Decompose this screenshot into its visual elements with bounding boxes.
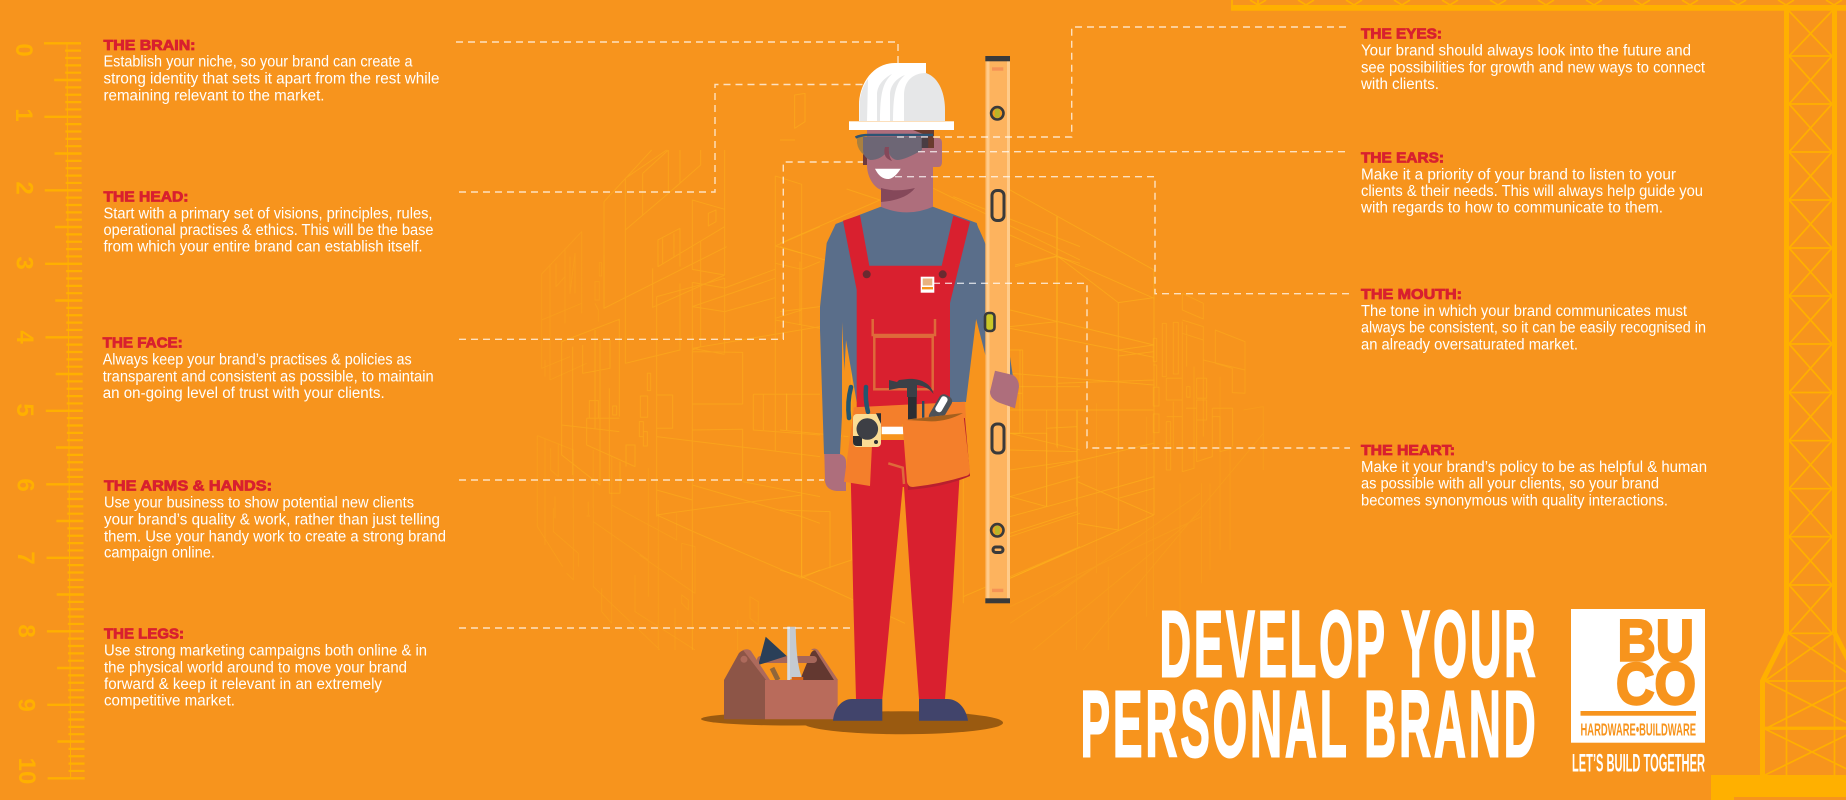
ruler numbers: 2 bbox=[10, 181, 37, 195]
title bbox=[1080, 592, 1538, 778]
text: the legs: Use strong marketing campaigns both online & in bbox=[104, 643, 427, 660]
level vial centres bbox=[995, 109, 1000, 535]
text: the ears: THE EARS: bbox=[1361, 150, 1444, 166]
text: the eyes: THE EYES: bbox=[1361, 27, 1442, 43]
straps buttons bbox=[863, 270, 947, 278]
text: the arms and hands: Use your business to show potential new clients bbox=[104, 495, 414, 512]
logo: BUCO: BU bbox=[1618, 609, 1694, 674]
icon: hammer bbox=[889, 379, 934, 421]
text: the legs: forward & keep it relevant in an extremely bbox=[104, 676, 382, 693]
icon: toolbox bbox=[724, 627, 838, 719]
text: the eyes: Your brand should always look into the future and bbox=[1361, 43, 1691, 60]
text: the ears: Make it a priority of your brand to listen to your bbox=[1361, 166, 1676, 183]
callout: head bbox=[459, 84, 867, 192]
callout: ears bbox=[918, 151, 1350, 153]
callout: face bbox=[459, 162, 863, 339]
text: the ears: clients & their needs. This will always help guide you bbox=[1361, 183, 1703, 200]
ruler numbers bbox=[10, 43, 40, 784]
logo: BUCO bbox=[1571, 609, 1705, 743]
icon: tape measure bbox=[853, 413, 881, 447]
text: the brain: THE BRAIN: bbox=[104, 38, 196, 54]
text: the ears bbox=[1360, 150, 1703, 217]
text: the heart: Make it your brand’s policy to be as helpful & human bbox=[1361, 459, 1707, 476]
ruler numbers: 7 bbox=[12, 551, 39, 565]
ruler bbox=[44, 42, 85, 780]
left hand bbox=[824, 454, 846, 491]
text: the legs: the physical world around to move your brand bbox=[104, 659, 407, 676]
gap between arm and torso bbox=[842, 322, 846, 452]
crane mast bbox=[1762, 5, 1846, 775]
text: the mouth: The tone in which your brand communicates must bbox=[1361, 303, 1688, 320]
neck and head bbox=[863, 130, 942, 214]
ruler numbers: 6 bbox=[12, 478, 39, 492]
level slots bbox=[992, 190, 1004, 552]
callout: brain bbox=[456, 42, 898, 64]
icon: screwdriver bbox=[922, 401, 924, 422]
bib pocket bbox=[873, 319, 935, 389]
text: the head: from which your entire brand can establish itself. bbox=[104, 239, 422, 256]
icon: cutter bbox=[927, 392, 954, 425]
logo: BUCO: HARDWARE•BUILDWARE bbox=[1580, 719, 1696, 739]
spirit level bbox=[985, 56, 1010, 603]
text: the face: Always keep your brand’s practises & policies as bbox=[103, 351, 412, 368]
text: the brain: Establish your niche, so your brand can create a bbox=[104, 54, 413, 71]
text: the face: an on-going level of trust with your clients. bbox=[103, 385, 385, 402]
crane bbox=[1231, 0, 1846, 800]
callout: eyes bbox=[897, 27, 1350, 137]
boots bbox=[833, 699, 968, 721]
text: the legs bbox=[104, 626, 427, 710]
text: the legs: THE LEGS: bbox=[104, 626, 184, 642]
logo: BUCO: CO bbox=[1616, 652, 1696, 717]
ruler numbers: 1 bbox=[10, 108, 37, 122]
ruler numbers: 4 bbox=[11, 330, 38, 344]
ruler numbers: 10 bbox=[13, 758, 40, 784]
badge bbox=[921, 277, 934, 293]
text: the brain: remaining relevant to the market. bbox=[104, 87, 324, 104]
text: the mouth bbox=[1361, 287, 1706, 354]
text: the eyes: with clients. bbox=[1360, 76, 1439, 93]
ruler numbers: 8 bbox=[12, 624, 39, 638]
callout: legs bbox=[459, 627, 854, 629]
text: the eyes bbox=[1360, 27, 1706, 93]
right column text bbox=[1360, 27, 1707, 509]
text: the brain: strong identity that sets it apart from the rest while bbox=[104, 71, 440, 88]
far arm bbox=[973, 223, 1013, 377]
text: the heart: THE HEART: bbox=[1361, 443, 1455, 459]
text: the arms and hands: THE ARMS & HANDS: bbox=[104, 478, 272, 494]
wireframe building background bbox=[537, 93, 1263, 650]
icon: saw bbox=[787, 627, 803, 681]
left column text bbox=[103, 38, 446, 710]
text: the arms and hands: campaign online. bbox=[104, 545, 215, 562]
text: the heart: as possible with all your clients, so your brand bbox=[1361, 476, 1659, 493]
text: the ears: with regards to how to communicate to them. bbox=[1360, 200, 1663, 217]
text: the brain bbox=[104, 38, 440, 104]
overalls bbox=[843, 215, 970, 699]
callout lines bbox=[456, 27, 1350, 628]
hard hat bbox=[849, 63, 954, 130]
text: the arms and hands: your brand’s quality & work, rather than just telling bbox=[104, 511, 440, 528]
ruler numbers: 5 bbox=[11, 403, 38, 417]
text: the mouth: always be consistent, so it can be easily recognised in bbox=[1361, 320, 1706, 337]
icon: trowel bbox=[758, 637, 787, 680]
shirt bbox=[820, 207, 985, 454]
ruler numbers: 9 bbox=[13, 698, 40, 712]
text: the heart: becomes synonymous with quality interactions. bbox=[1361, 492, 1668, 509]
character: construction worker bbox=[820, 63, 1013, 721]
text: the mouth: an already oversaturated market. bbox=[1361, 337, 1578, 354]
text: the head: THE HEAD: bbox=[104, 189, 188, 205]
ruler numbers: 3 bbox=[11, 256, 38, 270]
level vials bbox=[985, 107, 1004, 536]
text: the face bbox=[103, 335, 434, 402]
crane jib bbox=[1231, 5, 1846, 11]
icon: pliers bbox=[848, 387, 868, 418]
text: the eyes: see possibilities for growth and new ways to connect bbox=[1361, 59, 1706, 76]
fly stitch bbox=[888, 463, 904, 484]
callout: heart bbox=[933, 283, 1350, 448]
tool pocket bbox=[903, 418, 970, 490]
sunglasses bbox=[856, 135, 933, 161]
text: the arms and hands bbox=[104, 478, 446, 562]
text: the face: THE FACE: bbox=[103, 335, 183, 351]
tool belt bbox=[844, 379, 970, 490]
crane base bbox=[1711, 775, 1846, 800]
text: the heart bbox=[1361, 443, 1707, 509]
ground shadows bbox=[701, 711, 1003, 734]
callout: arms bbox=[459, 479, 824, 481]
text: the arms and hands: them. Use your handy work to create a strong brand bbox=[104, 528, 446, 545]
mouth bbox=[875, 169, 901, 179]
ruler numbers: 0 bbox=[10, 43, 37, 57]
text: the face: transparent and consistent as possible, to maintain bbox=[103, 368, 434, 385]
text: the head bbox=[104, 189, 434, 256]
callout: mouth bbox=[895, 177, 1350, 294]
text: the mouth: THE MOUTH: bbox=[1361, 287, 1462, 303]
text: the legs: competitive market. bbox=[104, 693, 235, 710]
right hand bbox=[990, 371, 1019, 408]
text: the head: Start with a primary set of visions, principles, rules, bbox=[104, 206, 432, 223]
text: the head: operational practises & ethics. This will be the base bbox=[104, 222, 434, 239]
